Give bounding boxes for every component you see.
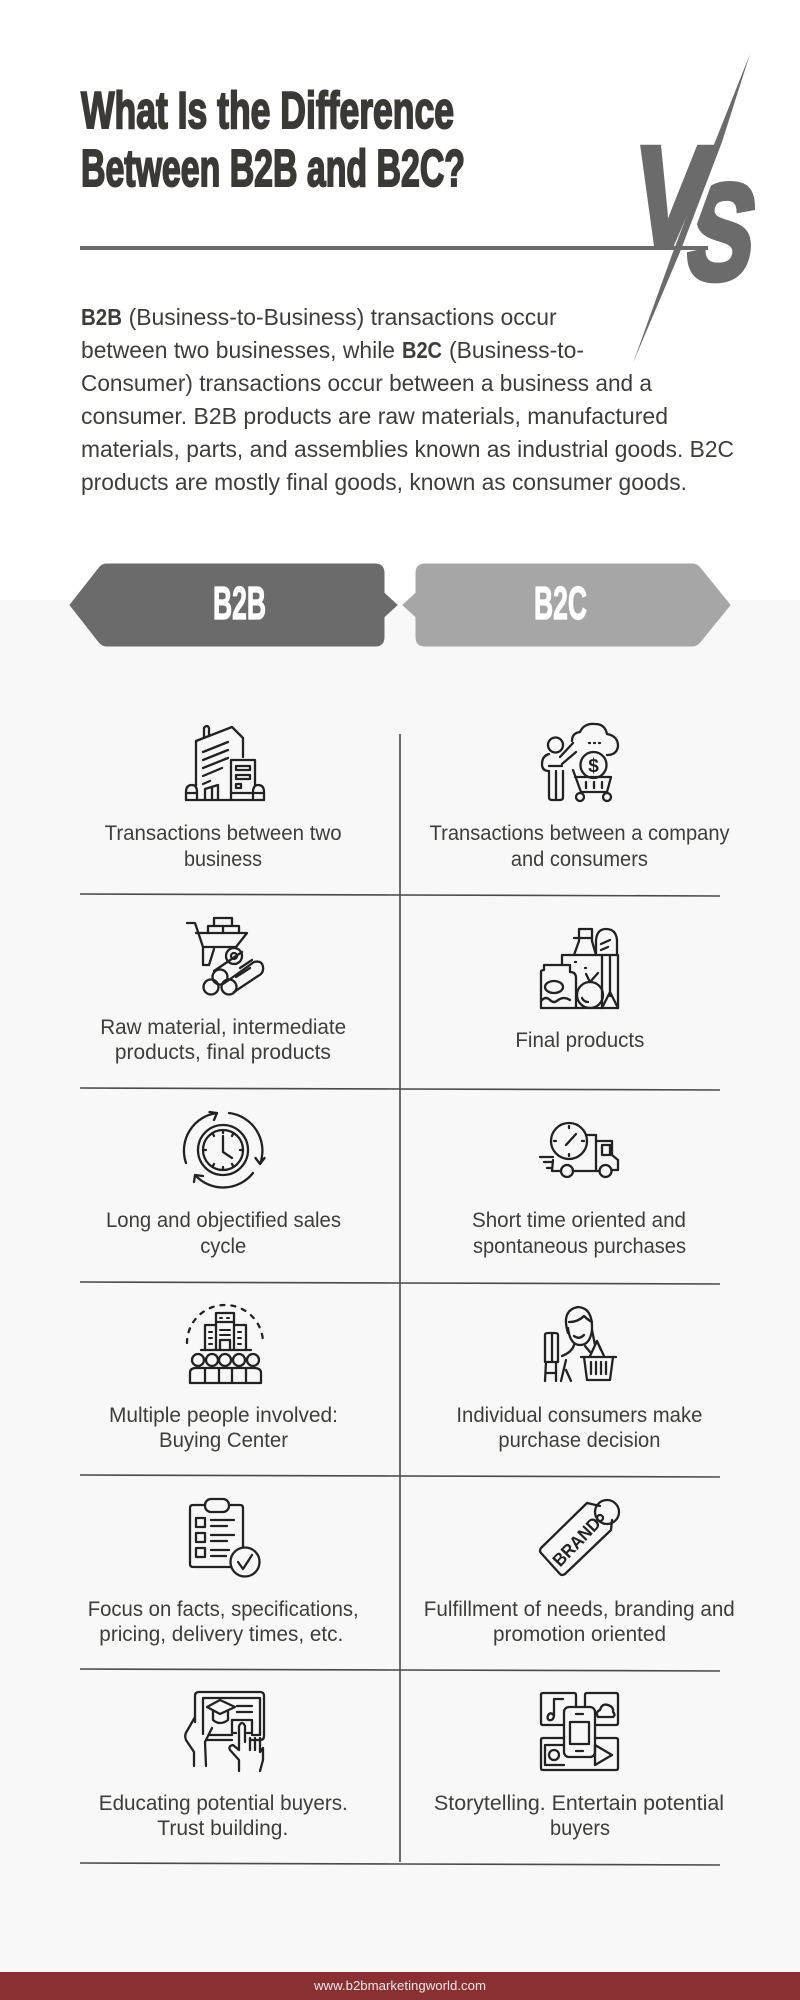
icon: phone with media tiles: [541, 1693, 618, 1770]
intro paragraph: B2C: [402, 337, 442, 363]
label: [434, 1792, 724, 1840]
label: Storytelling. Entertain potential: [434, 1792, 724, 1815]
label: [106, 1209, 341, 1258]
label: Educating potential buyers.: [99, 1792, 348, 1815]
title: What Is the Difference: [81, 82, 454, 140]
icon: shopper, cloud and cart: [542, 724, 618, 801]
cell: B2B transactions: [105, 726, 342, 871]
label: [100, 1016, 346, 1064]
icon: tablet with graduation cap and hands: [185, 1692, 264, 1771]
label: cycle: [200, 1235, 246, 1258]
label: [424, 1598, 735, 1646]
B2C header tab: [403, 564, 730, 646]
label: pricing, delivery times, etc.: [99, 1623, 343, 1646]
label: Transactions between two: [105, 822, 342, 845]
label: [430, 822, 730, 871]
label: and consumers: [511, 848, 648, 871]
B2C header tab: B2C: [534, 577, 587, 629]
icon: woman with shopping basket: [545, 1307, 616, 1381]
cell: B2C branding: [424, 1500, 735, 1646]
label: Transactions between a company: [430, 822, 730, 845]
label: [472, 1209, 686, 1258]
VS emblem with header rule: V: [622, 118, 720, 276]
intro paragraph: B2B: [81, 304, 122, 330]
icon: building with group of people: [187, 1305, 263, 1383]
label: Long and objectified sales: [106, 1209, 341, 1232]
label: Short time oriented and: [472, 1209, 686, 1232]
VS emblem with header rule: [80, 54, 765, 363]
VS emblem with header rule: S: [679, 157, 765, 309]
icon: groceries: [541, 929, 618, 1008]
intro paragraph: (Business-to-Business) transactions occur: [129, 304, 557, 330]
label: purchase decision: [498, 1429, 660, 1452]
icon: shopper, cloud and cart: $: [588, 756, 599, 777]
cell: B2B educating: [99, 1692, 348, 1840]
B2B header tab: B2B: [213, 577, 266, 629]
label: Raw material, intermediate: [100, 1016, 346, 1039]
label: buyers: [550, 1817, 610, 1840]
cell: B2C storytelling: [434, 1693, 724, 1840]
label: Multiple people involved:: [109, 1404, 338, 1427]
label: [109, 1404, 338, 1452]
icon: clipboard checklist: [190, 1499, 260, 1576]
cell: B2B sales cycle: [106, 1112, 341, 1258]
intro paragraph: between two businesses, while: [81, 337, 395, 363]
label: Individual consumers make: [456, 1404, 702, 1427]
intro paragraph: materials, parts, and assemblies known as industrial goods. B2C: [81, 436, 734, 462]
footer bar: [0, 1972, 800, 2000]
cell: B2B raw material: [100, 918, 346, 1064]
icon: brand tag: BRAND: [549, 1513, 605, 1570]
footer bar: www.b2bmarketingworld.com: [313, 1978, 486, 1993]
intro paragraph: products are mostly final goods, known as consumer goods.: [81, 469, 687, 495]
icon: clock with cycle arrows: [184, 1112, 264, 1187]
intro paragraph: consumer. B2B products are raw materials, manufactured: [81, 403, 668, 429]
cell: B2C final products: [515, 929, 644, 1052]
intro paragraph: Consumer) transactions occur between a business and a: [81, 370, 652, 396]
label: [105, 822, 342, 871]
label: [88, 1598, 359, 1646]
label: business: [184, 848, 262, 871]
label: Final products: [515, 1029, 644, 1052]
label: Fulfillment of needs, branding and: [424, 1598, 735, 1621]
comparison grid lines: [80, 734, 720, 1865]
B2B header tab: [70, 564, 397, 646]
cell: B2C individual consumers: [456, 1307, 702, 1452]
label: [456, 1404, 702, 1452]
cell: B2C transactions: [430, 724, 730, 871]
icon: brand tag: [540, 1500, 619, 1575]
cell: B2B buying center: [109, 1305, 338, 1452]
label: products, final products: [115, 1041, 331, 1064]
icon: delivery truck with clock: [540, 1123, 618, 1177]
intro paragraph: [81, 304, 734, 495]
icon: office buildings: [186, 726, 264, 800]
label: Focus on facts, specifications,: [88, 1598, 359, 1621]
cell: B2B facts: [88, 1499, 359, 1646]
icon: wheelbarrow and logs: [187, 918, 263, 994]
cell: B2C short time: [472, 1123, 686, 1258]
label: spontaneous purchases: [473, 1235, 686, 1258]
label: [99, 1792, 348, 1840]
title: Between B2B and B2C?: [81, 140, 465, 198]
title: [81, 82, 465, 198]
label: Buying Center: [159, 1429, 288, 1452]
label: Trust building.: [157, 1817, 288, 1840]
label: promotion oriented: [493, 1623, 666, 1646]
intro paragraph: (Business-to-: [449, 337, 584, 363]
